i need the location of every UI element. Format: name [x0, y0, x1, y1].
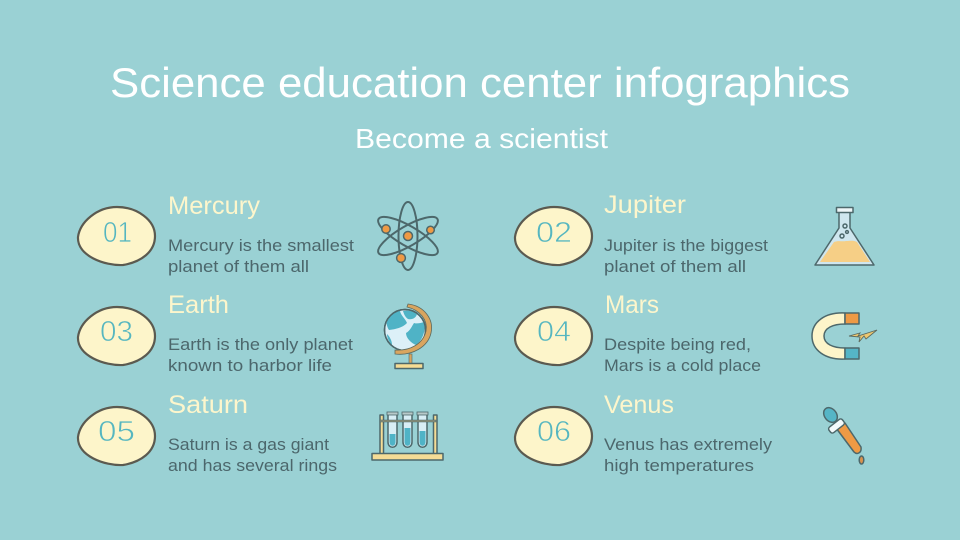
icon: dropper	[821, 405, 864, 464]
text: Mercury description	[168, 236, 354, 276]
number badge 06	[515, 407, 592, 465]
title: Science education center infographics	[110, 59, 850, 106]
icon: atom	[374, 202, 442, 270]
text: Mars description: Despite being red,	[604, 335, 751, 354]
icon: globe	[384, 304, 432, 368]
text: Saturn description	[168, 435, 337, 475]
number badge 01: 01	[103, 217, 132, 249]
heading: Mars: Mars	[605, 291, 659, 319]
subtitle: Become a scientist	[355, 123, 608, 154]
panel: Saturn	[78, 391, 443, 475]
text: Earth description: Earth is the only planet	[168, 335, 353, 354]
text: Mars description	[604, 335, 761, 375]
number badge 05: 05	[98, 416, 135, 448]
panel: Earth	[78, 291, 432, 375]
heading: Earth: Earth	[168, 291, 229, 319]
heading: Mercury: Mercury	[168, 192, 260, 220]
text: Jupiter description	[604, 236, 768, 276]
icon: flask	[815, 208, 874, 265]
text: Saturn description: Saturn is a gas giant	[168, 435, 329, 454]
number badge 02: 02	[536, 217, 572, 249]
icon: magnet	[812, 313, 877, 359]
text: Venus description: high temperatures	[604, 456, 754, 475]
heading: Saturn: Saturn	[168, 391, 248, 419]
text: Venus description: Venus has extremely	[604, 435, 773, 454]
text: Venus description	[604, 435, 773, 475]
text: Earth description: known to harbor life	[168, 356, 332, 375]
number badge 03: 03	[100, 316, 133, 348]
text: Jupiter description: planet of them all	[604, 257, 746, 276]
text: Jupiter description: Jupiter is the biggest	[604, 236, 768, 255]
heading: Venus: Venus	[604, 391, 674, 419]
number badge 04	[515, 307, 592, 365]
number badge 03	[78, 307, 155, 365]
text: Earth description	[168, 335, 353, 375]
text: Saturn description: and has several rings	[168, 456, 337, 475]
panel: Venus	[515, 391, 864, 475]
number badge 04: 04	[537, 316, 571, 348]
heading: Jupiter: Jupiter	[604, 191, 686, 219]
number badge 01	[78, 207, 155, 265]
number badge 06: 06	[537, 416, 571, 448]
text: Mars description: Mars is a cold place	[604, 356, 761, 375]
panel: Jupiter	[515, 191, 874, 276]
text: Mercury description: Mercury is the smallest	[168, 236, 354, 255]
icon: test tubes	[372, 412, 443, 460]
panel: Mars	[515, 291, 877, 375]
number badge 05	[78, 407, 155, 465]
number badge 02	[515, 207, 592, 265]
text: Mercury description: planet of them all	[168, 257, 309, 276]
panel: Mercury	[78, 192, 442, 276]
